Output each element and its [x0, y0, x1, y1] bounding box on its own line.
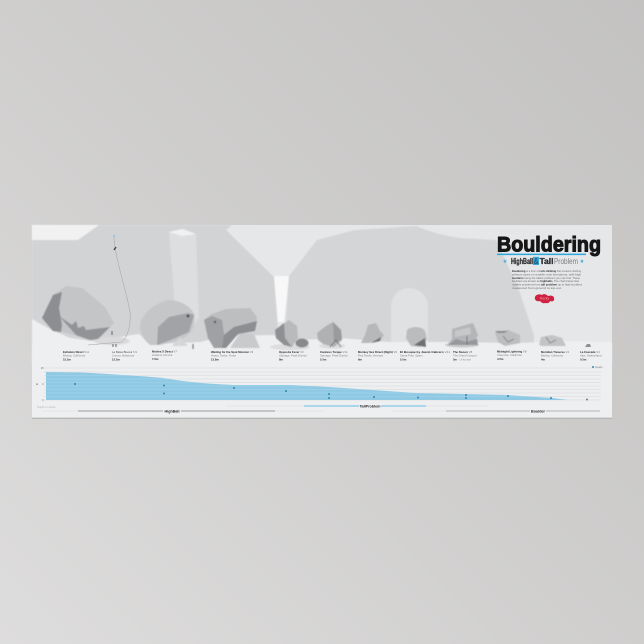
label: Careless Torque: Stanage, Peak District — [320, 354, 348, 358]
label: Evilution Direct — [63, 350, 90, 361]
label: La Cascade: Alps, Switzerland — [580, 354, 602, 358]
label: The Swoon — [453, 350, 477, 361]
category bar: TallProblem — [226, 403, 488, 408]
label: La Cascade: 0.5m — [580, 357, 587, 361]
intro text: notable problems from tall problem up to high boulders — [512, 283, 583, 287]
label: Mothra X Direct: Mothra X Direct V7 — [152, 350, 177, 354]
label: Monkey Sex Direct: Monkey Sex Direct (Right) V9 — [358, 350, 397, 354]
label: Monkey Sex Direct: Red Rocks, Nevada — [358, 354, 383, 358]
label: Waiting for the Spot Monster — [211, 350, 254, 361]
label: El Bosque: Santa Pola, Spain — [400, 354, 423, 358]
label: Waiting for the Spot Monster: 13.8m — [211, 357, 219, 361]
label: Meridian Traverse: Meridian Traverse V4 — [541, 350, 569, 354]
source note: height in metres — [37, 405, 56, 409]
label: La Balsa Blanca — [112, 350, 137, 361]
subtitle: HighBall — [511, 257, 533, 266]
boulder 8: The Swoon — [445, 323, 479, 348]
label: Careless Torque: 5.5m — [320, 357, 327, 361]
label: Monkey Sex Direct — [358, 350, 397, 361]
category bar: Boulder — [391, 408, 600, 414]
y axis labels — [36, 366, 44, 402]
label: Careless Torque — [320, 350, 348, 361]
boulder 1: Evilution Direct — [42, 286, 130, 345]
label: Mothra X Direct: 7.6m — [152, 357, 159, 361]
intro text: boulders are known as highballs. The chart below lists — [512, 279, 580, 283]
height chart — [32, 363, 612, 418]
label: Careless Torque: Careless Torque V14 — [320, 350, 348, 354]
title: Bouldering — [497, 232, 601, 256]
ground — [32, 319, 612, 365]
y axis labels: 9 — [42, 382, 44, 386]
label: Midnight Lightning — [497, 350, 527, 361]
boulder 9: Midnight Lightning — [495, 330, 520, 346]
intro text: without ropes on smaller rock formations, with high — [512, 272, 581, 276]
intro text: Bouldering is a form of rock climbing that involves climbing — [512, 269, 581, 273]
boulder 5: Careless Torque — [317, 322, 345, 349]
label: La Balsa Blanca: Comox, Bahamas — [112, 354, 135, 358]
poster sheet — [32, 225, 612, 419]
label: La Balsa Blanca: La Balsa Blanca 5.9 — [112, 350, 137, 354]
y axis labels: 18 — [41, 366, 44, 370]
label: La Cascade — [580, 350, 602, 361]
chart legend: Grade — [592, 365, 603, 369]
area: height profile — [46, 372, 568, 400]
category bar: Boulder: Boulder — [531, 409, 546, 413]
boulder 11: La Cascade — [585, 344, 591, 347]
label: Opposite Fever: Stanage, Peak District — [279, 354, 307, 358]
label: Opposite Fever — [279, 350, 307, 361]
label: Midnight Lightning: Midnight Lightning V8 — [497, 350, 527, 354]
label: La Balsa Blanca: 12.2m — [112, 357, 120, 361]
label: Mothra X Direct: Holland, Arizona — [152, 353, 173, 357]
boulder 6: Monkey Sex Direct — [361, 323, 384, 343]
subtitle — [503, 257, 585, 266]
red climbing hold badge: Rocky — [540, 296, 549, 300]
label: El Bosque: El Bosque by Jacob Cabrero V11 — [400, 350, 450, 354]
route rope with climber — [88, 235, 130, 347]
subtitle: ★ — [580, 258, 585, 265]
label: Evilution Direct: 15.2m — [63, 357, 71, 361]
problem labels — [63, 350, 602, 361]
boulder 2: Mothra X Direct — [140, 300, 194, 349]
label: Meridian Traverse: 4m — [541, 357, 546, 361]
chart legend: Grade: Grade — [595, 365, 603, 369]
label: The Swoon: The Swoon V8 — [453, 350, 473, 354]
y axis labels: m — [36, 383, 39, 386]
label: Meridian Traverse — [541, 350, 569, 361]
label: Meridian Traverse: Bishop, California — [541, 354, 563, 358]
label: Midnight Lightning: Yosemite, California — [497, 353, 522, 357]
label: Waiting for the Spot Monster: Waiting for the Spot Monster V4 — [211, 350, 254, 354]
intro text: measured from ground to top-out. — [512, 286, 562, 290]
category bar: HighBall — [42, 408, 325, 414]
label: Mothra X Direct — [152, 350, 177, 361]
subtitle: ★ — [503, 258, 508, 265]
data points — [74, 383, 588, 400]
intro text: boulders being the tallest problems you can find. These — [512, 276, 580, 280]
label: Waiting for the Spot Monster: Hueco Tanks, Texas — [211, 354, 237, 358]
label: El Bosque — [400, 350, 450, 361]
cliff backdrop — [32, 225, 534, 345]
label: Opposite Fever: 8m — [279, 357, 284, 361]
label: The Swoon: The Grand Canyon — [453, 354, 477, 358]
label: Midnight Lightning: 4.5m — [497, 357, 504, 361]
label: The Swoon: 5m · Unknown — [453, 357, 472, 361]
poster artwork — [32, 225, 612, 419]
boulder 7: El Bosque — [406, 327, 427, 347]
intro text — [512, 269, 583, 290]
subtitle: Problem — [554, 257, 578, 266]
label: Evilution Direct: Bishop, California — [63, 354, 85, 358]
subtitle: Tall — [540, 257, 554, 266]
boulder 3: Waiting for the Spot Monster — [204, 308, 260, 348]
label: La Cascade: La Cascade V4 — [580, 350, 600, 354]
boulder 10: Meridian Traverse — [539, 335, 566, 346]
y axis labels: 0 — [42, 398, 44, 402]
label: Evilution Direct: Evilution Direct V11 — [63, 350, 90, 354]
label: Opposite Fever: Opposite Fever V3 — [279, 350, 304, 354]
category bar: TallProblem: TallProblem — [360, 404, 381, 408]
title rule — [497, 254, 586, 255]
subtitle: & — [534, 257, 539, 266]
red climbing hold badge — [535, 294, 554, 303]
category bar: HighBall: HighBall — [165, 409, 179, 413]
label: El Bosque: 5.5m — [400, 357, 407, 361]
boulder 4: Opposite Fever — [270, 320, 310, 350]
label: Monkey Sex Direct: 6m — [358, 357, 363, 361]
